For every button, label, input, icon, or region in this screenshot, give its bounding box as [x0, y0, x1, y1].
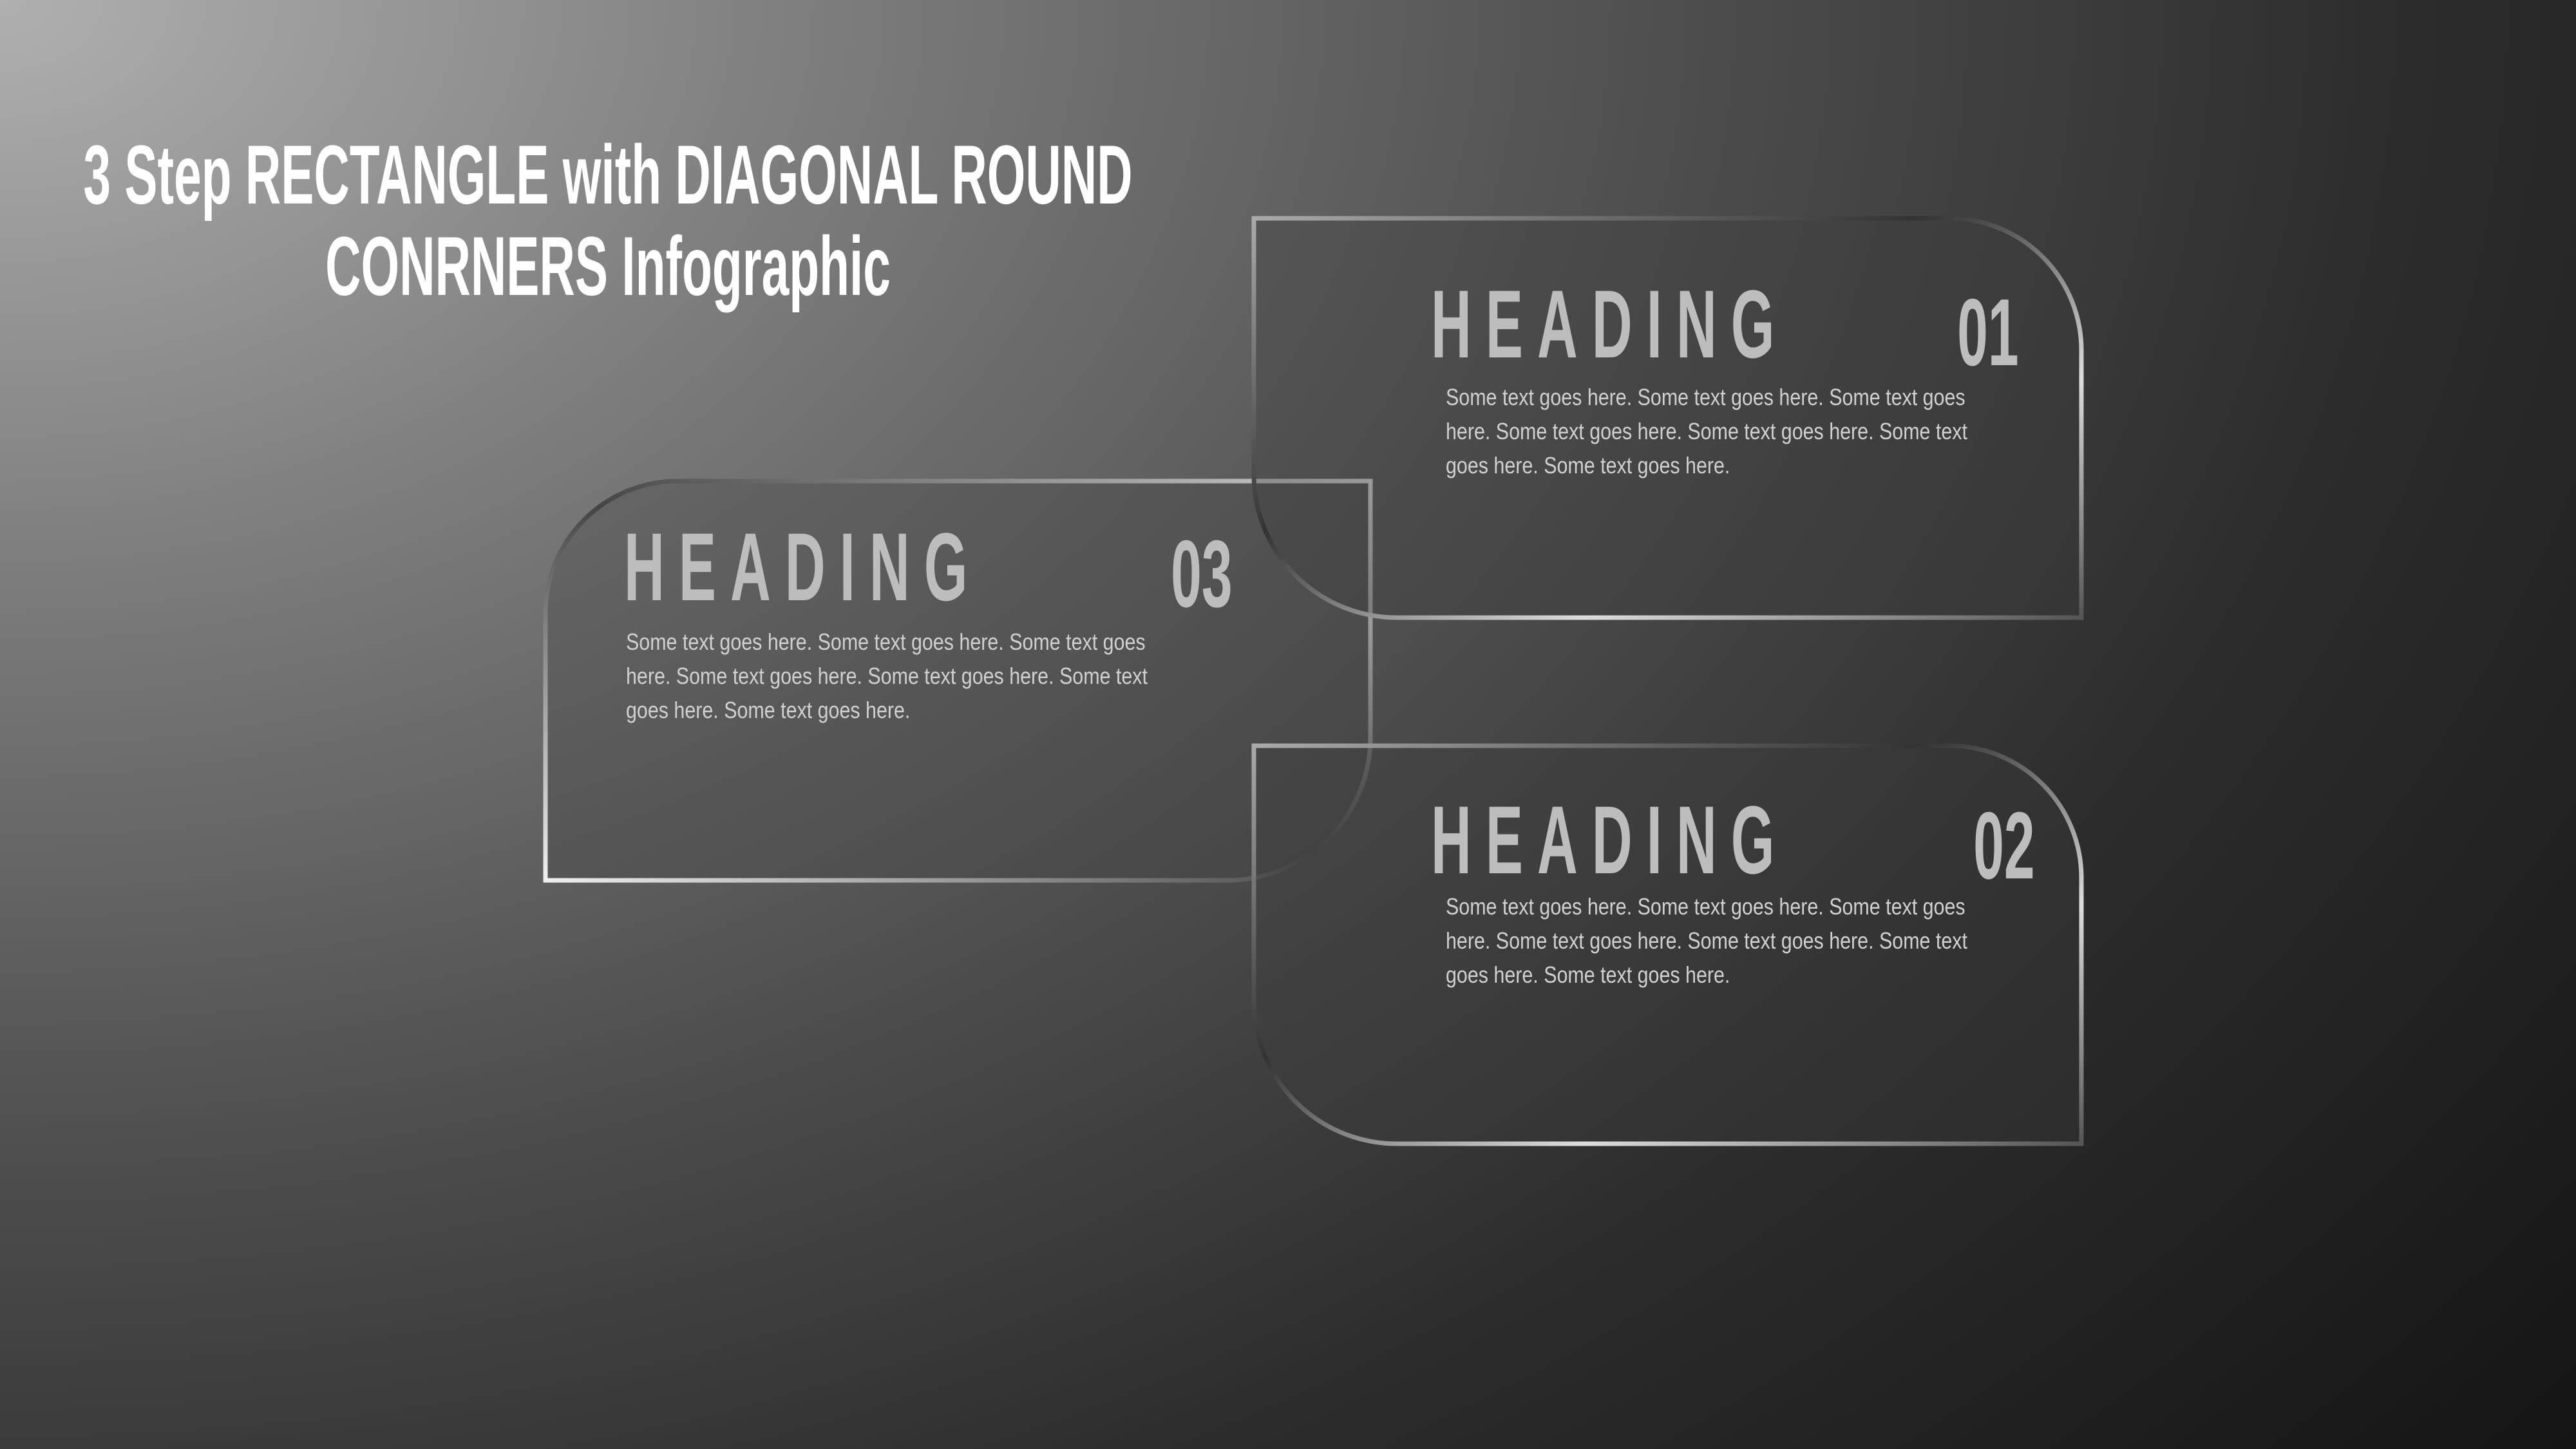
- text 03: goes here. Some text goes here.: [626, 697, 910, 723]
- box 02: [1254, 746, 2081, 1144]
- heading 01: HEADING: [1431, 270, 1788, 378]
- text 01: [1446, 384, 1967, 478]
- box 01: [1254, 218, 2081, 618]
- title: 3 Step RECTANGLE with DIAGONAL ROUND: [83, 128, 1133, 222]
- text 02: [1446, 893, 1967, 988]
- text 03: [626, 629, 1148, 723]
- number 03: 03: [1171, 521, 1233, 627]
- text 01: goes here. Some text goes here.: [1446, 452, 1730, 478]
- text 03: here. Some text goes here. Some text goes here. Some text: [626, 663, 1148, 689]
- text 01: here. Some text goes here. Some text goes here. Some text: [1446, 418, 1967, 444]
- title: [83, 128, 1133, 313]
- box 03: [545, 481, 1370, 880]
- title: CONRNERS Infographic: [325, 219, 891, 313]
- text 02: Some text goes here. Some text goes here. Some text goes: [1446, 893, 1965, 920]
- heading 03: HEADING: [624, 513, 981, 621]
- number 02: 02: [1974, 793, 2035, 899]
- number 01: 01: [1958, 279, 2019, 386]
- heading 02: HEADING: [1431, 786, 1788, 894]
- text 03: Some text goes here. Some text goes here. Some text goes: [626, 629, 1146, 655]
- text 02: goes here. Some text goes here.: [1446, 961, 1730, 988]
- text 01: Some text goes here. Some text goes here. Some text goes: [1446, 384, 1965, 410]
- text 02: here. Some text goes here. Some text goes here. Some text: [1446, 927, 1967, 954]
